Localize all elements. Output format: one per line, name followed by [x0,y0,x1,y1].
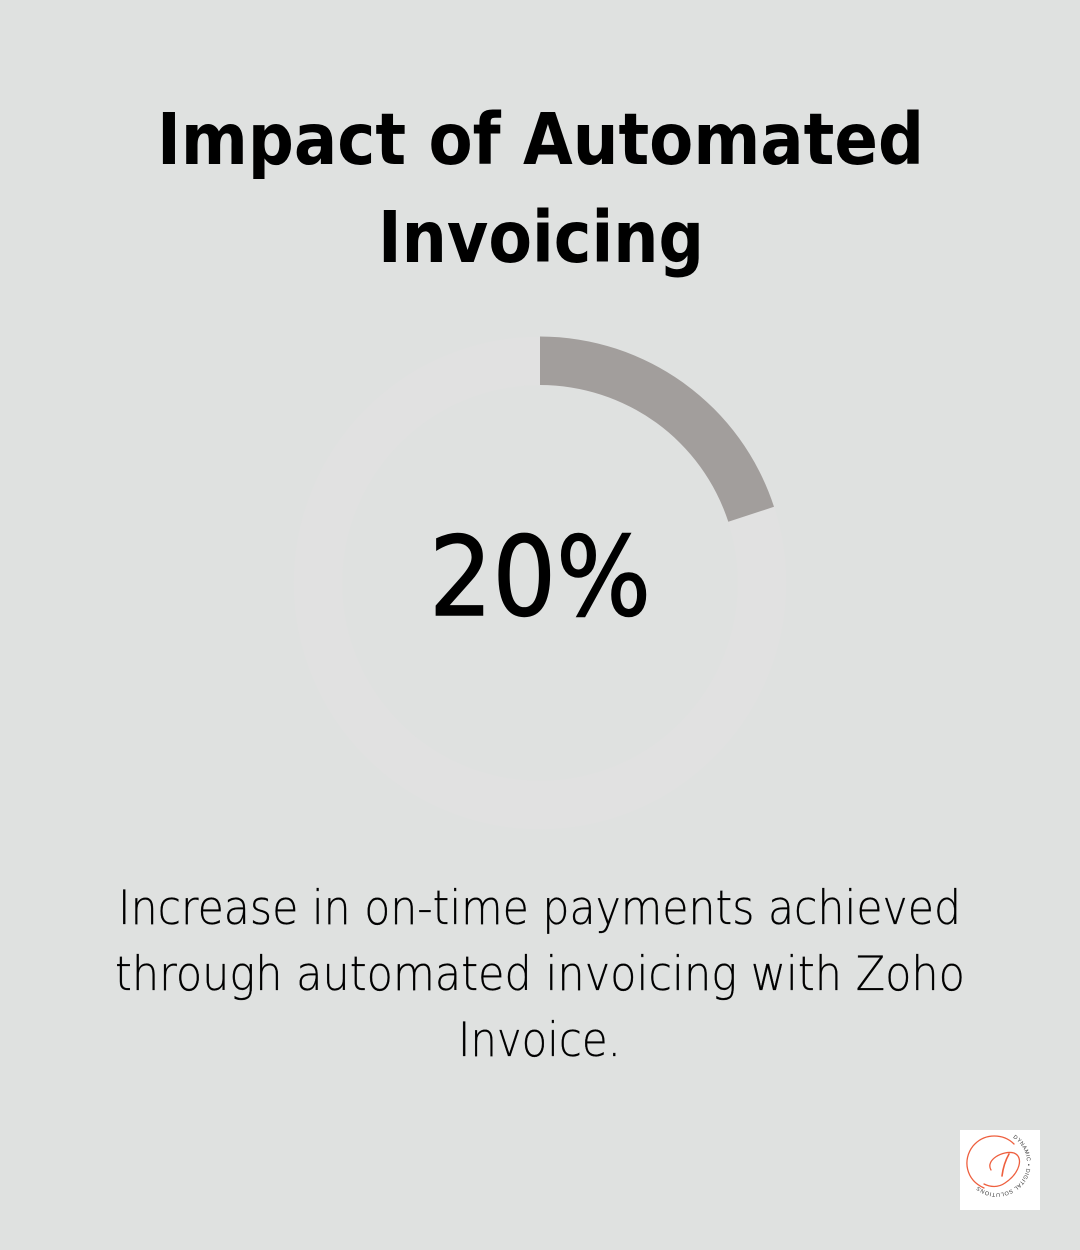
title: Impact of Automated [157,98,924,181]
description text: Invoice. [458,1013,621,1068]
logo badge [960,1130,1040,1210]
donut value: 20% [429,513,651,641]
logo: circular text: DYNAMIC • DIGITAL SOLUTIONS [976,1134,1031,1197]
logo: script monogram [967,1136,1020,1188]
title [157,98,924,279]
description text: through automated invoicing with Zoho [115,947,965,1002]
donut chart: 20% [318,336,774,805]
description text [115,881,965,1068]
description text: Increase in on-time payments achieved [118,881,961,936]
title: Invoicing [378,196,704,279]
